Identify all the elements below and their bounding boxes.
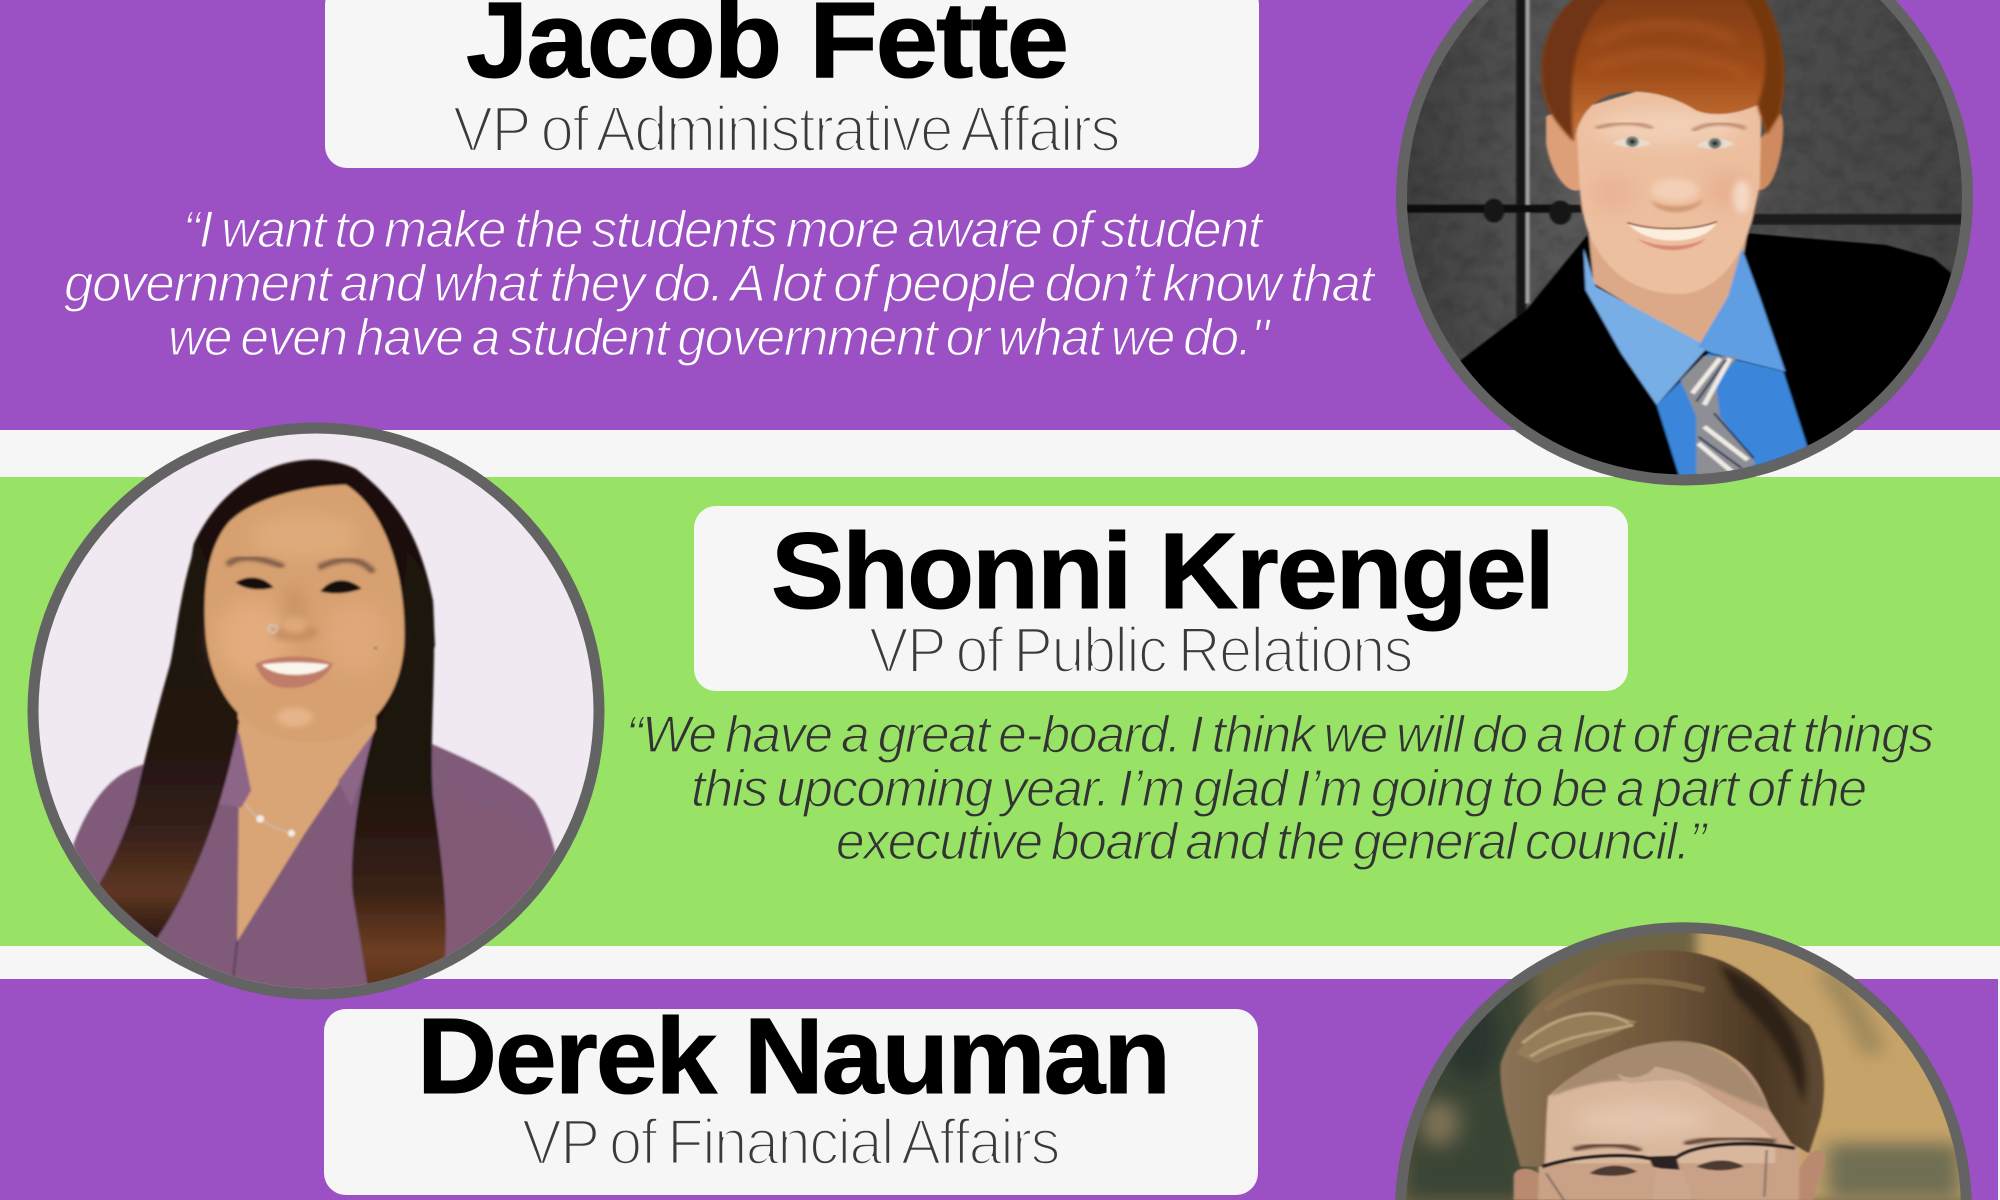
- band: Shonni Krengel green panel: [0, 477, 2000, 946]
- quote: Jacob Fette: government and what they do. A lot of people don’t know that: [64, 255, 1377, 313]
- role: VP of Public Relations: VP of Public Relations: [869, 614, 1412, 686]
- role: VP of Administrative Affairs: VP of Administrative Affairs: [453, 93, 1119, 165]
- portrait: Jacob Fette: [1396, 0, 1973, 486]
- quote: Jacob Fette: [64, 201, 1377, 367]
- name card: Shonni Krengel: [694, 506, 1628, 691]
- name: Shonni Krengel: Shonni Krengel: [771, 510, 1553, 631]
- quote: Shonni Krengel: “We have a great e-board. I think we will do a lot of great things: [626, 706, 1933, 764]
- quote: Jacob Fette: we even have a student government or what we do.": [168, 309, 1272, 367]
- quote: Shonni Krengel: executive board and the general council.”: [836, 813, 1709, 871]
- quote: Jacob Fette: “I want to make the students more aware of student: [183, 201, 1265, 259]
- portrait: Shonni Krengel: [28, 422, 604, 1000]
- quote: Shonni Krengel: this upcoming year. I’m glad I’m going to be a part of the: [691, 760, 1866, 818]
- band: Jacob Fette purple panel: [0, 0, 2000, 430]
- quote: Shonni Krengel: [626, 706, 1933, 871]
- band: Derek Nauman purple panel: [0, 979, 1998, 1200]
- name card: Jacob Fette: [325, 0, 1259, 168]
- role: VP of Financial Affairs: VP of Financial Affairs: [522, 1106, 1059, 1178]
- name: Derek Nauman: Derek Nauman: [417, 995, 1169, 1116]
- name card: Derek Nauman: [324, 995, 1258, 1195]
- portrait: Derek Nauman: [1380, 920, 2000, 1200]
